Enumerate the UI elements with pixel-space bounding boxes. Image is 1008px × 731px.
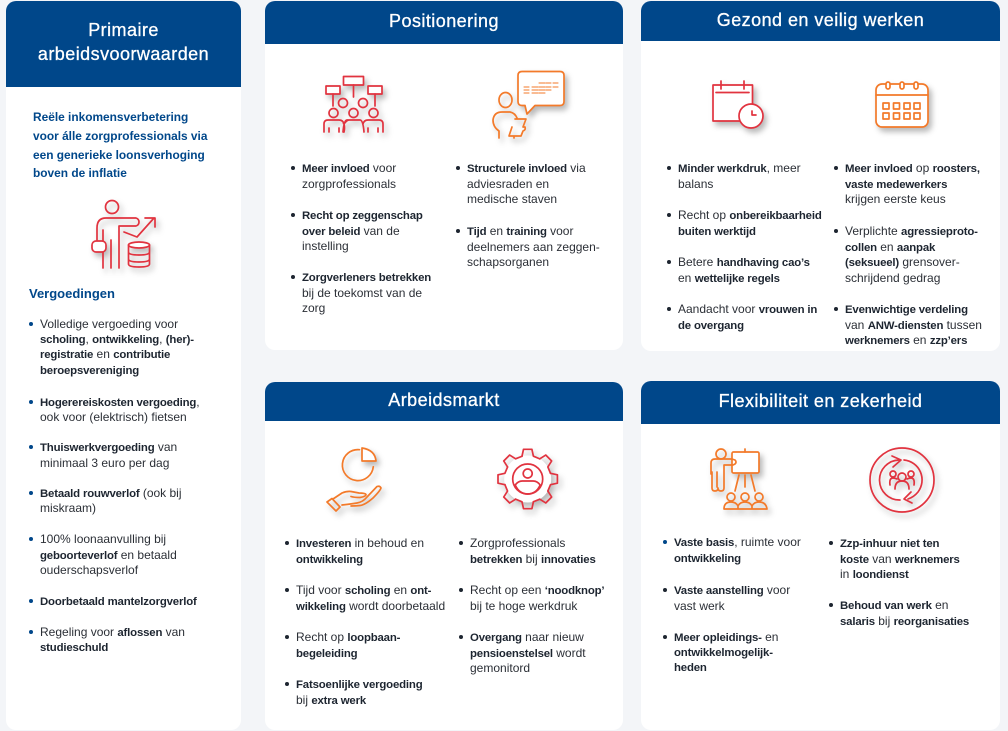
list: gezond column 2: werknemers en zzp’ers <box>845 333 967 347</box>
list: vergoedingen: Regeling voor aflossen van <box>40 625 185 639</box>
list: positionering column 1: bij de toekomst van de <box>302 286 422 300</box>
heading: arbeidsmarkt <box>265 382 623 421</box>
heading: positionering: Positionering <box>389 11 499 31</box>
list: positionering column 1: over beleid van de <box>302 224 400 238</box>
list: positionering column 1: zorgprofessionals <box>302 177 396 191</box>
list: arbeidsmarkt column 1: Tijd voor scholing en ont- <box>296 583 431 597</box>
list: positionering column 2: schapsorganen <box>467 255 549 269</box>
list: flexibiliteit column 1: Meer opleidings- en <box>674 630 778 644</box>
list: flexibiliteit column 2 <box>829 538 969 628</box>
list: arbeidsmarkt column 1: ontwikkeling <box>296 554 363 566</box>
list: vergoedingen: miskraam) <box>40 501 96 515</box>
list: gezond column 1 <box>667 161 822 332</box>
list: flexibiliteit column 2: Zzp-inhuur niet ten <box>840 538 939 550</box>
heading: positionering <box>265 1 623 44</box>
list: gezond column 2: krijgen eerste keus <box>845 192 946 206</box>
list: flexibiliteit column 1: heden <box>674 662 707 674</box>
intro text: voor álle zorgprofessionals via <box>33 129 207 143</box>
list: positionering column 2: medische staven <box>467 192 557 206</box>
heading: flexibiliteit en zekerheid <box>641 381 1000 424</box>
list: gezond column 1: balans <box>678 176 713 190</box>
list: gezond column 2: van ANW-diensten tussen <box>845 318 982 332</box>
icon: calendar <box>875 81 935 135</box>
heading: gezond en veilig werken <box>641 1 1000 41</box>
list: gezond column 2: collen en aanpak <box>845 240 935 254</box>
list: arbeidsmarkt column 2: bij te hoge werkdruk <box>470 598 577 612</box>
list: flexibiliteit column 2: koste van werknemers <box>840 552 960 566</box>
list: positionering column 2: Tijd en training voor <box>467 224 573 238</box>
panel: positionering <box>265 1 623 350</box>
list: arbeidsmarkt column 1: Investeren in behoud en <box>296 536 424 550</box>
list: vergoedingen: ouderschapsverlof <box>40 563 138 577</box>
heading: gezond en veilig werken: Gezond en veilig werken <box>717 10 924 30</box>
list: positionering column 1: instelling <box>302 239 349 253</box>
list: vergoedingen: Hogerereiskosten vergoeding, <box>40 395 200 409</box>
list: gezond column 1: Aandacht voor vrouwen in <box>678 302 817 316</box>
list: vergoedingen <box>29 317 200 654</box>
list: gezond column 2: Meer invloed op roosters, <box>845 161 980 175</box>
list: vergoedingen: Betaald rouwverlof (ook bij <box>40 486 182 500</box>
list: arbeidsmarkt column 1: Fatsoenlijke vergoeding <box>296 679 422 691</box>
intro text: Reële inkomensverbetering <box>33 110 188 124</box>
list: vergoedingen: studieschuld <box>40 642 108 654</box>
panel: gezond en veilig werken <box>641 1 1000 351</box>
icon: calendar with clock <box>712 80 770 136</box>
list: flexibiliteit column 1: Vaste aanstelling voor <box>674 583 790 597</box>
list: positionering column 2: adviesraden en <box>467 177 549 191</box>
list: vergoedingen: beroepsvereniging <box>40 365 139 377</box>
list: gezond column 1: Minder werkdruk, meer <box>678 161 801 175</box>
list: gezond column 1: en wettelijke regels <box>678 270 780 284</box>
list: flexibiliteit column 2: Behoud van werk en <box>840 598 948 612</box>
list: vergoedingen: Thuiswerkvergoeding van <box>40 440 177 454</box>
list: arbeidsmarkt column 2: Zorgprofessionals <box>470 536 565 550</box>
list: vergoedingen: registratie en contributie <box>40 347 170 361</box>
list: flexibiliteit column 2: in loondienst <box>840 567 909 581</box>
intro text <box>33 110 208 180</box>
list: flexibiliteit column 1: Vaste basis, ruimte voor <box>674 535 801 549</box>
heading: primaire arbeidsvoorwaarden: arbeidsvoorwaarden <box>38 44 209 64</box>
panel: flexibiliteit en zekerheid <box>641 381 1000 730</box>
list: flexibiliteit column 1: ontwikkeling <box>674 552 741 564</box>
list: gezond column 2: (seksueel) grensover- <box>845 255 960 269</box>
subheading: vergoedingen: Vergoedingen <box>29 286 115 301</box>
panel: arbeidsmarkt <box>265 382 623 730</box>
list: positionering column 1: Recht op zeggenschap <box>302 210 423 222</box>
heading: primaire arbeidsvoorwaarden: Primaire <box>88 20 159 40</box>
list: arbeidsmarkt column 2: pensioenstelsel wordt <box>470 646 586 660</box>
list: vergoedingen: ook voor (elektrisch) fietsen <box>40 410 187 424</box>
list: vergoedingen: scholing, ontwikkeling, (her)- <box>40 332 194 346</box>
icon: presenter with audience <box>710 448 772 516</box>
icon: gear with person <box>497 448 564 516</box>
list: arbeidsmarkt column 2 <box>459 536 604 675</box>
list: flexibiliteit column 1: vast werk <box>674 598 725 612</box>
list: arbeidsmarkt column 2: Recht op een ‘noodknop’ <box>470 583 604 597</box>
list: vergoedingen: minimaal 3 euro per dag <box>40 456 169 470</box>
heading: flexibiliteit en zekerheid: Flexibiliteit en zekerheid <box>719 391 922 411</box>
list: flexibiliteit column 1 <box>663 535 801 674</box>
heading: arbeidsmarkt: Arbeidsmarkt <box>388 390 500 410</box>
list: positionering column 1 <box>291 161 431 315</box>
list: vergoedingen: geboorteverlof en betaald <box>40 548 177 562</box>
list: gezond column 1: Betere handhaving cao’s <box>678 255 810 269</box>
list: positionering column 1: Zorgverleners betrekken <box>302 272 431 284</box>
list: positionering column 2: deelnemers aan zeggen- <box>467 240 600 254</box>
list: arbeidsmarkt column 1: bij extra werk <box>296 692 366 706</box>
list: arbeidsmarkt column 2: gemonitord <box>470 661 530 675</box>
list: arbeidsmarkt column 2: betrekken bij innovaties <box>470 552 596 566</box>
panel: primaire arbeidsvoorwaarden <box>6 1 241 730</box>
list: vergoedingen: 100% loonaanvulling bij <box>40 532 166 546</box>
list: positionering column 1: zorg <box>302 301 325 315</box>
list: gezond column 1: buiten werktijd <box>678 226 756 238</box>
list: arbeidsmarkt column 2: Overgang naar nieuw <box>470 630 584 644</box>
list: vergoedingen: Volledige vergoeding voor <box>40 317 178 331</box>
list: positionering column 2 <box>456 161 600 269</box>
intro text: een generieke loonsverhoging <box>33 148 205 162</box>
icon: person with chart and database <box>91 200 162 274</box>
list: gezond column 2: vaste medewerkers <box>845 178 947 190</box>
list: flexibiliteit column 2: salaris bij reorganisaties <box>840 614 969 628</box>
list: arbeidsmarkt column 1: begeleiding <box>296 648 357 660</box>
list: positionering column 1: Meer invloed voor <box>302 161 396 175</box>
list: gezond column 2: schrijdend gedrag <box>845 270 940 284</box>
list: gezond column 2 <box>834 161 982 347</box>
icon: hand with pie chart <box>326 447 386 518</box>
list: arbeidsmarkt column 1: wikkeling wordt doorbetaald <box>296 598 445 612</box>
list: vergoedingen: Doorbetaald mantelzorgverlof <box>40 596 197 608</box>
list: arbeidsmarkt column 1: Recht op loopbaan- <box>296 630 400 644</box>
list: arbeidsmarkt column 1 <box>285 536 445 706</box>
list: gezond column 1: Recht op onbereikbaarheid <box>678 208 822 222</box>
list: gezond column 1: de overgang <box>678 320 744 332</box>
icon: circle arrows with people <box>869 447 940 520</box>
icon: people with signs <box>323 76 390 138</box>
list: gezond column 2: Verplichte agressieproto- <box>845 224 978 238</box>
list: gezond column 2: Evenwichtige verdeling <box>845 304 968 316</box>
intro text: boven de inflatie <box>33 166 127 180</box>
list: flexibiliteit column 1: ontwikkelmogelijk- <box>674 647 773 659</box>
list: positionering column 2: Structurele invloed via <box>467 161 586 175</box>
heading: primaire arbeidsvoorwaarden <box>6 1 241 87</box>
icon: person with speech bubble <box>492 70 571 144</box>
